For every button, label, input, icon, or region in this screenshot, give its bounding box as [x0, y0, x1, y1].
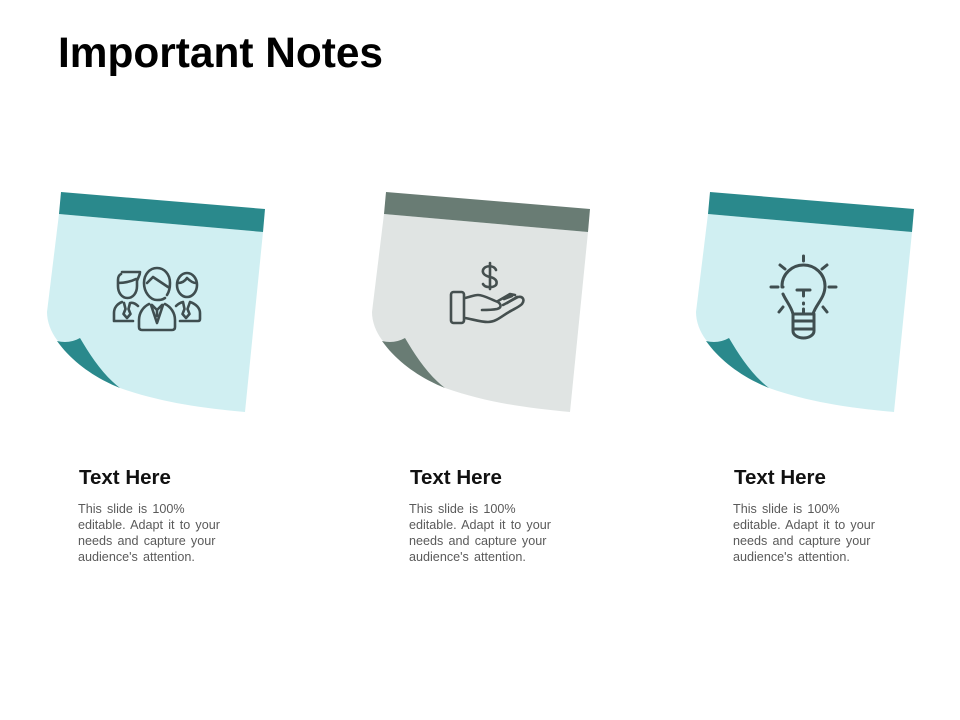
text block: column 3 body: audience's attention. [733, 550, 850, 564]
text block: column 2 body [409, 502, 551, 564]
text block: column 3 body [733, 502, 875, 564]
icon: business team [114, 268, 200, 330]
text block: column 1 body: audience's attention. [78, 550, 195, 564]
icon: hand with dollar [451, 263, 523, 323]
text block: column 2 body: editable. Adapt it to your [409, 518, 551, 532]
text block: column 1 body [78, 502, 220, 564]
text block: column 2 heading: Text Here [410, 466, 502, 489]
text block: column 1 body: This slide is 100% [78, 502, 185, 516]
text block: column 2 body: This slide is 100% [409, 502, 516, 516]
text block: column 1 body: editable. Adapt it to your [78, 518, 220, 532]
title: Important Notes [58, 29, 383, 76]
panel: note 2 [372, 192, 590, 412]
panel: note 1 [47, 192, 265, 412]
text block: column 1 body: needs and capture your [78, 534, 215, 548]
text block: column 3 heading: Text Here [734, 466, 826, 489]
text block: column 3 body: This slide is 100% [733, 502, 840, 516]
panel: note 3 [696, 192, 914, 412]
icon: light bulb [771, 256, 836, 338]
text block: column 2 body: audience's attention. [409, 550, 526, 564]
text block: column 3 body: editable. Adapt it to your [733, 518, 875, 532]
text block: column 3 body: needs and capture your [733, 534, 870, 548]
text block: column 2 body: needs and capture your [409, 534, 546, 548]
text block: column 1 heading: Text Here [79, 466, 171, 489]
